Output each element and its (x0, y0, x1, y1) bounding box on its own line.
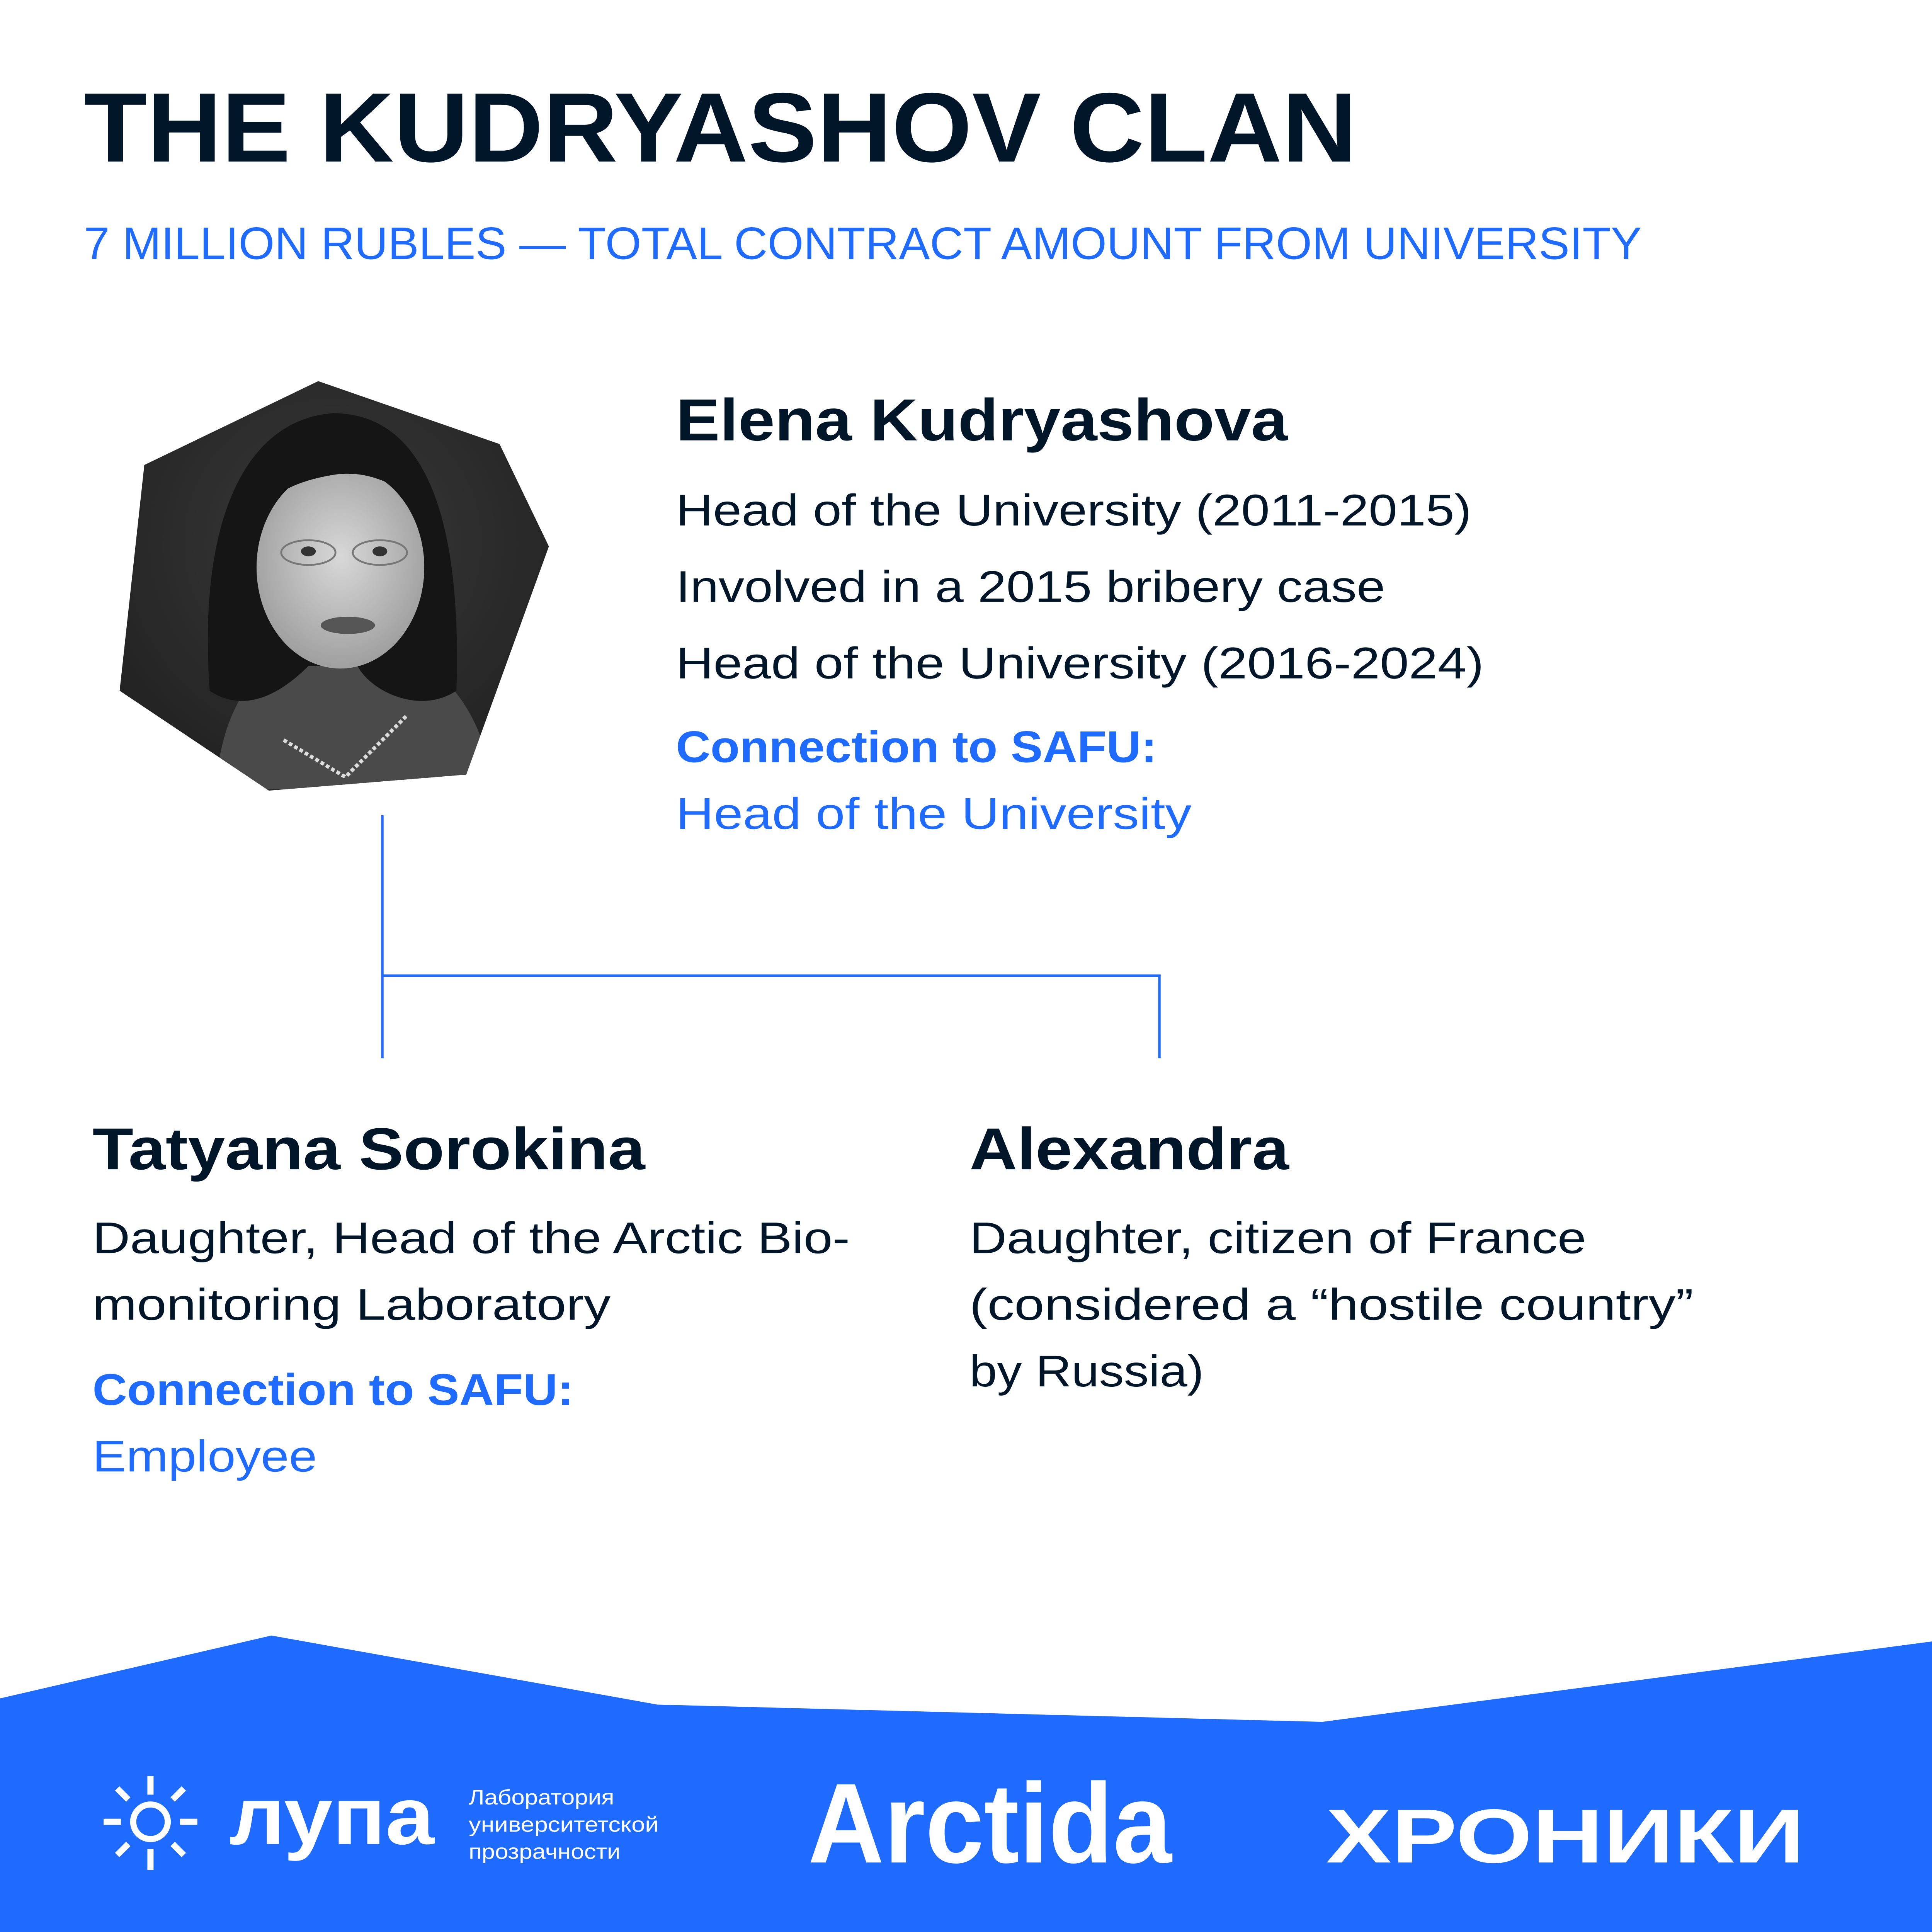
Elena details (676, 486, 1484, 688)
Elena details: Involved in a 2015 bribery case (676, 562, 1385, 612)
Tatyana connection (92, 1365, 573, 1481)
icon: sun (lupa logo) (104, 1776, 197, 1870)
Tatyana connection: Employee (92, 1432, 317, 1481)
Tatyana details (92, 1213, 850, 1330)
footer band (0, 1624, 1932, 1932)
Tatyana name: Tatyana Sorokina (92, 1116, 646, 1182)
subtitle: 7 MILLION RUBLES — TOTAL CONTRACT AMOUNT FROM UNIVERSITY (84, 218, 1642, 269)
Alexandra details: Daughter, citizen of France (969, 1213, 1586, 1263)
Alexandra name: Alexandra (969, 1116, 1290, 1182)
logo: Хроники: ХРОНИКИ (1326, 1793, 1804, 1879)
Tatyana connection: Connection to SAFU: (92, 1365, 573, 1415)
Elena details: Head of the University (2016-2024) (676, 639, 1484, 688)
Elena name: Elena Kudryashova (676, 387, 1289, 453)
logo tagline: прозрачности (469, 1840, 621, 1863)
family tree connector lines (383, 815, 1160, 1058)
logo: Arctida: Arctida (808, 1760, 1172, 1887)
Tatyana details: monitoring Laboratory (92, 1280, 611, 1330)
logo tagline: университетской (469, 1813, 659, 1836)
logo tagline: Лаборатория (469, 1786, 614, 1809)
Elena details: Head of the University (2011-2015) (676, 486, 1471, 535)
title: THE KUDRYASHOV CLAN (84, 73, 1357, 183)
Elena connection: Head of the University (676, 789, 1192, 838)
logo: лупа: лупа (230, 1770, 435, 1861)
Alexandra details: by Russia) (969, 1347, 1204, 1396)
photo: Elena Kudryashova (111, 370, 555, 802)
Tatyana details: Daughter, Head of the Arctic Bio- (92, 1213, 850, 1263)
Alexandra details (969, 1213, 1694, 1396)
logo tagline (469, 1786, 659, 1863)
Alexandra details: (considered a “hostile country” (969, 1280, 1694, 1330)
Elena connection (676, 723, 1192, 838)
Elena connection: Connection to SAFU: (676, 723, 1157, 772)
